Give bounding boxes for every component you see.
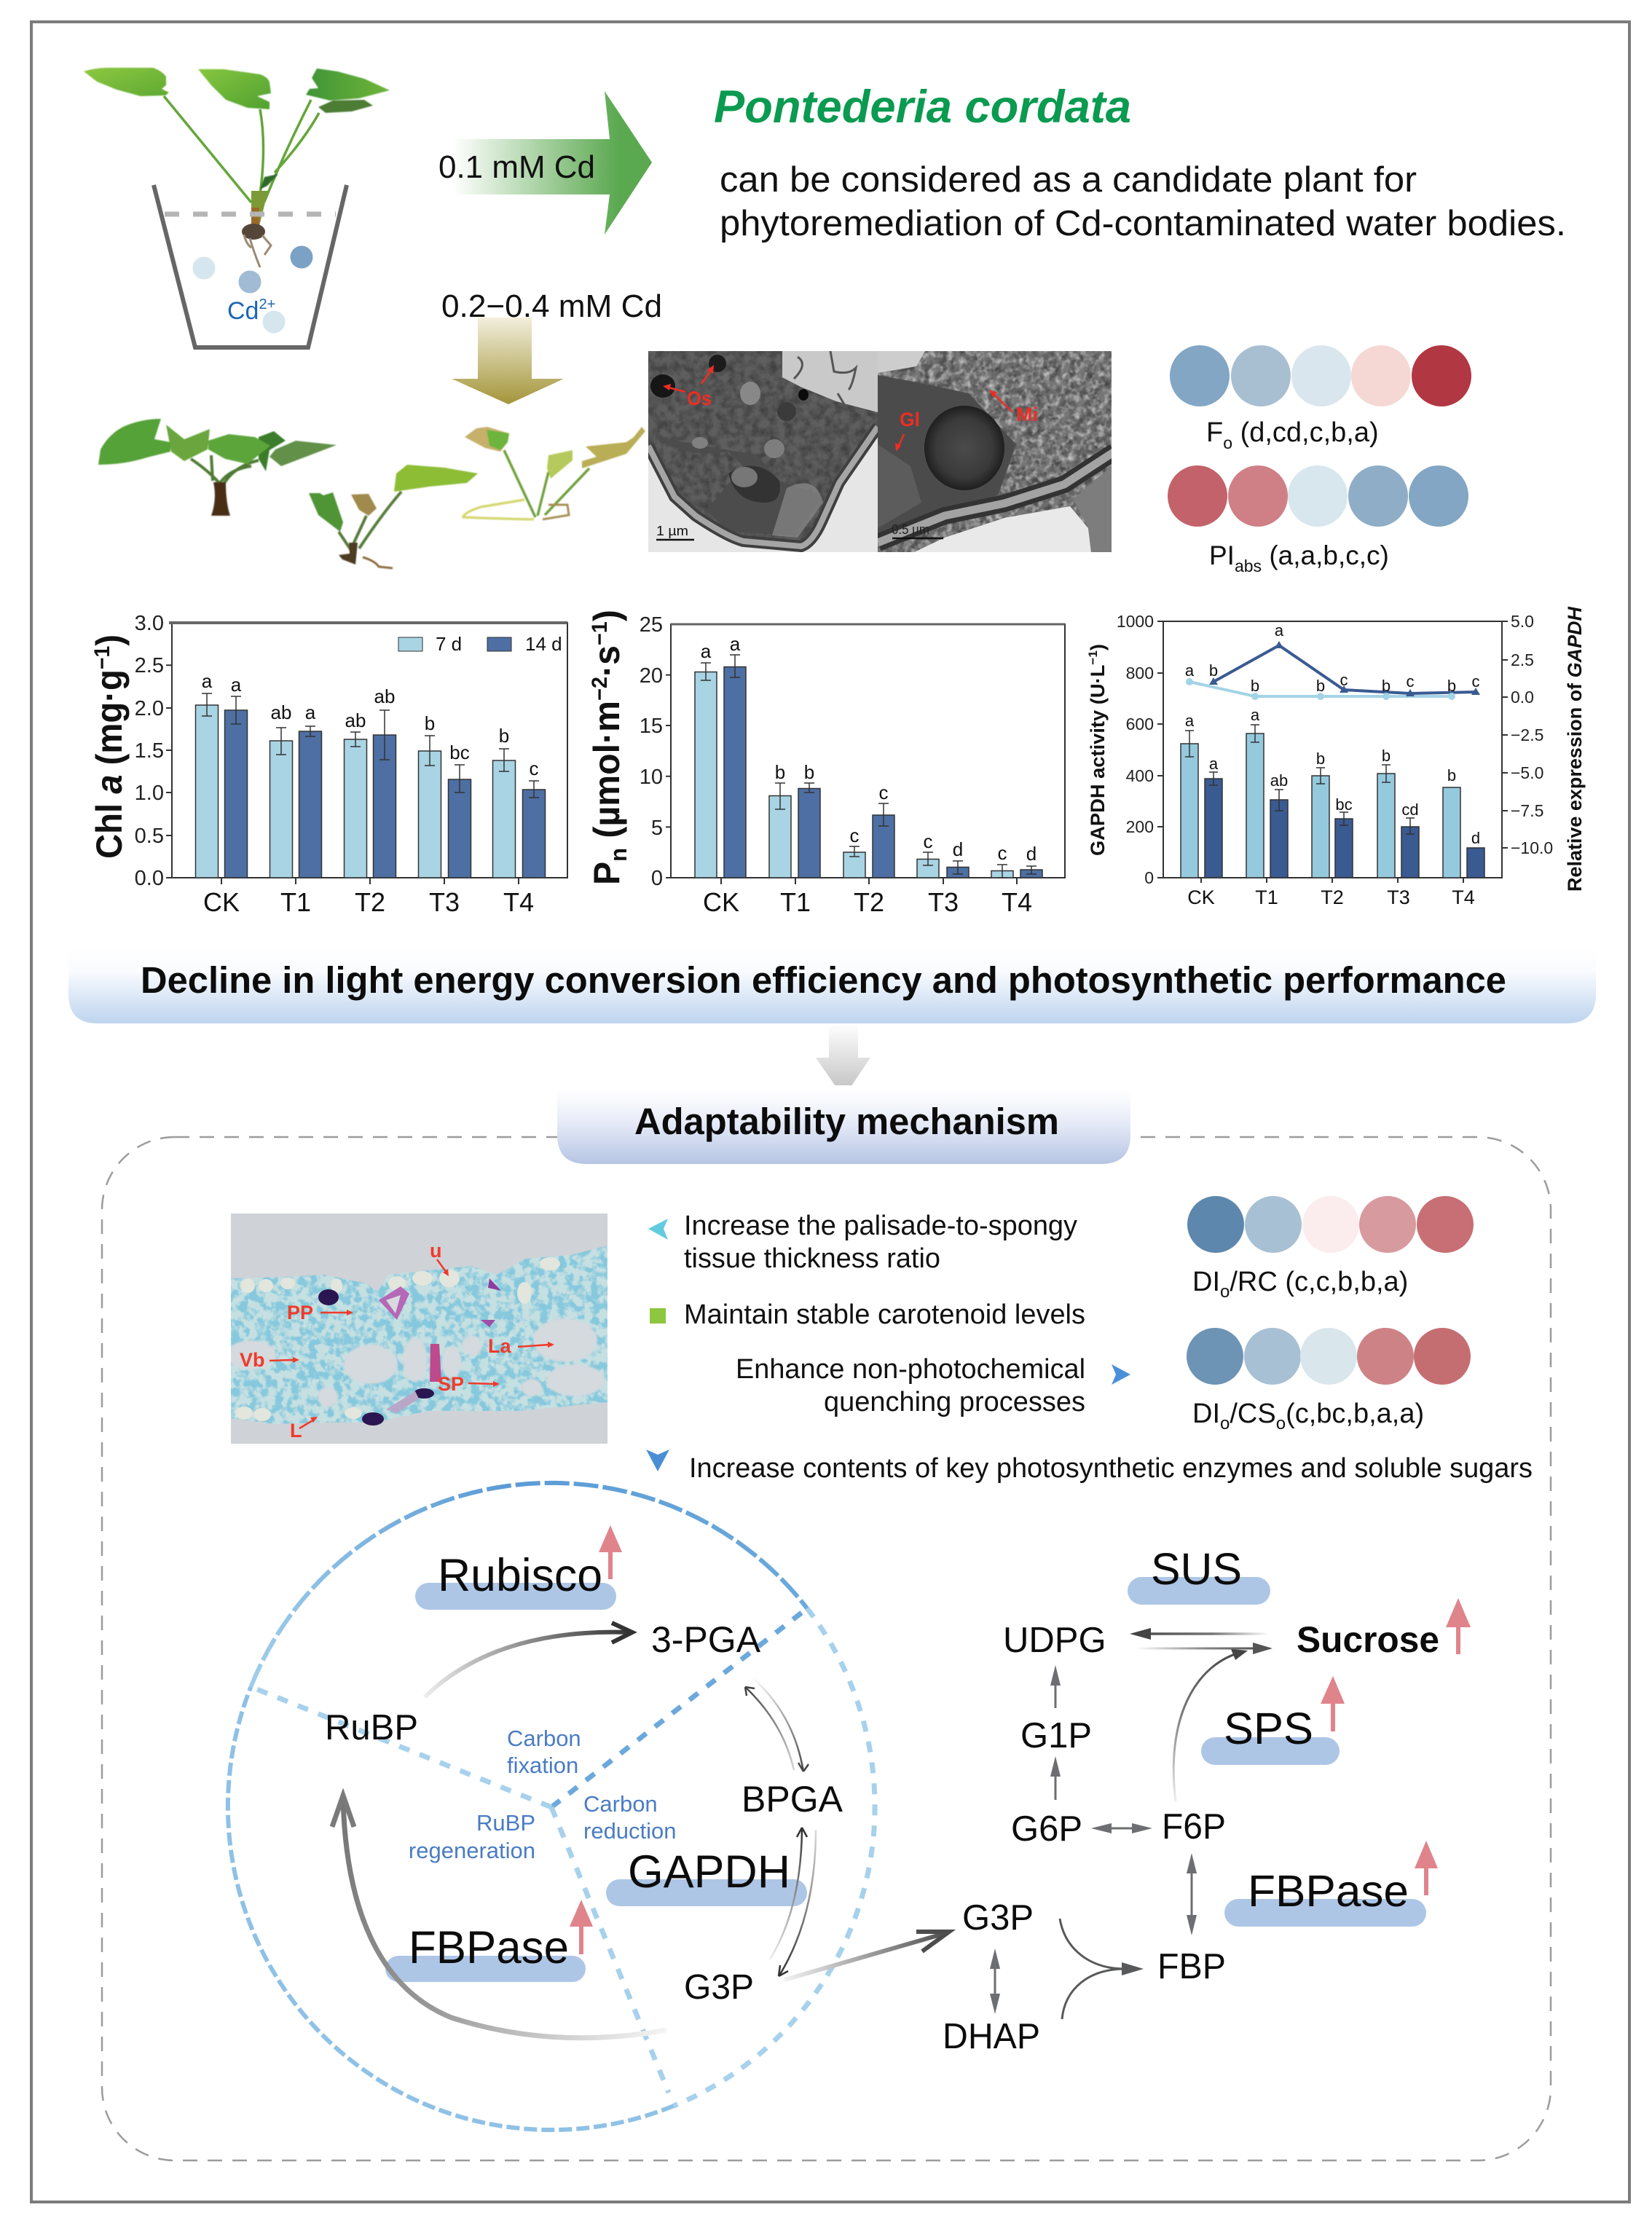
bars 7 d [195, 705, 516, 878]
y axis title: −2 [588, 677, 612, 701]
y axis title: n [605, 848, 632, 862]
banner: adaptability: Adaptability mechanism [634, 1101, 1059, 1142]
enzyme labels: FBPase [1248, 1866, 1409, 1916]
wilted plant B [309, 465, 478, 568]
significance letters: ab [1270, 771, 1288, 790]
x labels: T2 [355, 887, 385, 917]
x labels: T3 [928, 887, 959, 917]
dashed panel: adaptability mechanism [102, 1137, 1551, 2160]
y ticks: 1.5 [135, 739, 164, 763]
left y title: −1 [1086, 650, 1100, 665]
label: DIo/RC: DI [1192, 1267, 1220, 1297]
y axis title: ) [89, 634, 130, 646]
significance letters: a [730, 633, 741, 655]
left y ticks: 600 [1126, 715, 1154, 734]
significance letters: ab [345, 709, 366, 731]
arrows: 3-PGA and BPGA [745, 1679, 809, 1771]
significance letters: cd [1401, 801, 1419, 819]
x labels: CK [1187, 886, 1215, 908]
pill: FBPase [385, 1956, 586, 1982]
right y ticks: −5.0 [1511, 763, 1543, 782]
TEM arrows [666, 368, 1012, 449]
x labels: T4 [503, 887, 534, 917]
banner: decline: Decline in light energy conversion efficiency and photosynthetic performance [141, 959, 1506, 1001]
significance letters: a [1275, 621, 1284, 640]
x labels: T4 [1452, 886, 1475, 908]
significance letters: b [499, 725, 509, 747]
heat circles: Fo [1170, 345, 1471, 406]
TEM labels [663, 365, 1038, 452]
pill: FBPase right [1224, 1899, 1426, 1927]
bullet: palisade ratio: Increase the palisade-to-spongy [684, 1211, 1077, 1241]
right y ticks: −7.5 [1511, 801, 1543, 820]
significance letters: a [1185, 712, 1195, 730]
significance letters: ab [374, 685, 395, 707]
expression lines [1189, 645, 1476, 696]
conclusion text [720, 160, 1566, 243]
stage labels: fixation [507, 1753, 578, 1778]
x labels: T1 [780, 887, 811, 917]
right y ticks: −2.5 [1511, 725, 1543, 744]
y ticks: 1.0 [135, 782, 164, 805]
x labels: T2 [854, 887, 884, 917]
label: Fo: o [1223, 433, 1232, 452]
legend: 14 d [525, 633, 562, 655]
significance letters: b [804, 761, 814, 783]
label: PIabs: (a,a,b,c,c) [1262, 540, 1389, 570]
metabolite labels: FBP [1157, 1947, 1226, 1986]
top axis [671, 624, 1065, 625]
x labels: CK [703, 887, 739, 917]
plant stems [164, 96, 319, 202]
stage labels: Carbon [507, 1726, 581, 1751]
enzyme labels: GAPDH [628, 1847, 790, 1897]
label: DIo/RC: /RC (c,c,b,b,a) [1230, 1267, 1408, 1297]
significance letters: c [1340, 671, 1348, 689]
bullet: carotenoid: Maintain stable carotenoid levels [684, 1299, 1085, 1330]
bars 14 d [1205, 779, 1484, 878]
label: DIo/CSo: o [1220, 1414, 1230, 1433]
right y ticks: 2.5 [1511, 650, 1534, 669]
significance letters: c [1471, 672, 1480, 691]
significance letters: a [701, 640, 712, 662]
metabolite labels: G3P [962, 1898, 1034, 1938]
significance letters: a [202, 670, 213, 692]
significance letters [202, 670, 539, 779]
y ticks: 5 [651, 817, 663, 840]
banner: adaptability [557, 1085, 1130, 1164]
error bars [701, 655, 1037, 878]
arrow: 0.2-0.4 mM Cd: 0.2−0.4 mM Cd [441, 288, 662, 324]
label: Fo: F [1206, 417, 1223, 448]
up arrow: FBPase [570, 1900, 593, 1954]
arrow: 0.1 mM Cd [438, 91, 652, 235]
significance letters: b [1447, 766, 1456, 784]
significance letters: b [1382, 677, 1391, 695]
axis frame [1163, 621, 1502, 878]
bars 7 d [695, 672, 1013, 878]
pill: SUS [1128, 1577, 1270, 1605]
x ticks [221, 878, 519, 884]
y axis title: (µmol·m [586, 701, 627, 848]
arrow: F6P to Sucrose [1173, 1649, 1248, 1801]
metabolite labels: UDPG [1003, 1621, 1106, 1660]
significance letters [1185, 621, 1480, 847]
arrow: G3P export [784, 1932, 949, 1980]
label: Os: Os [687, 388, 712, 409]
significance letters: b [1382, 747, 1391, 765]
stage labels: reduction [583, 1818, 677, 1844]
significance letters: b [1447, 677, 1456, 695]
cadmium ions [192, 246, 313, 334]
y ticks: 25 [640, 613, 663, 637]
cycle dividers [255, 1609, 806, 2093]
y axis title: ·s [586, 645, 627, 677]
significance letters: ab [271, 701, 291, 723]
TEM micrograph left [648, 351, 878, 552]
legend [398, 633, 562, 655]
significance letters: a [1185, 661, 1195, 680]
right y title: Relative expression of GAPDH [1564, 607, 1586, 892]
x labels [1187, 886, 1475, 908]
x ticks [1201, 878, 1463, 883]
y axis title: Chl a (mg·g [89, 664, 130, 859]
section labels: PP [287, 1302, 313, 1324]
metabolite labels: F6P [1162, 1807, 1226, 1847]
Sucrose label: Sucrose [1297, 1619, 1439, 1660]
arrows: G3P and DHAP to FBP [1060, 1919, 1144, 2019]
y ticks: 20 [640, 664, 663, 688]
significance letters: b [1209, 661, 1218, 680]
label: PIabs: abs [1235, 556, 1262, 575]
significance letters: b [1316, 750, 1325, 768]
x labels [203, 887, 534, 917]
enzyme labels: FBPase [409, 1922, 569, 1973]
Cd2+ label: Cd [227, 297, 259, 325]
stage labels: Carbon [583, 1791, 658, 1817]
wilted plant A [98, 419, 337, 516]
significance letters: b [1251, 677, 1259, 695]
chart: Chl a [89, 612, 567, 917]
significance letters: c [529, 758, 539, 779]
leaf cross-section micrograph [227, 1214, 607, 1444]
pill: Rubisco [415, 1583, 616, 1610]
significance letters: d [1026, 843, 1037, 865]
label: PIabs: PI [1209, 540, 1235, 570]
y ticks: 0.0 [135, 867, 164, 890]
left y ticks [1117, 612, 1154, 887]
label: DIo/CSo: DI [1192, 1399, 1220, 1429]
arrows: gluconeogenesis steps [990, 1665, 1197, 2014]
section labels: SP [438, 1373, 464, 1395]
Calvin cycle diagram [228, 1483, 949, 2130]
species name: Pontederia cordata [714, 82, 1131, 133]
metabolite labels: G1P [1020, 1716, 1092, 1755]
heat circles: PIabs [1168, 465, 1468, 527]
x labels: T1 [1255, 886, 1278, 908]
metabolite labels [943, 1621, 1226, 2056]
x labels: T3 [429, 887, 460, 917]
heat circles: DIo/RC [1187, 1196, 1474, 1253]
significance letters: a [231, 674, 242, 696]
right y ticks: −10.0 [1511, 838, 1553, 857]
y ticks: 0 [651, 867, 663, 890]
label: DIo/CSo: o [1276, 1414, 1286, 1433]
significance letters: b [425, 712, 435, 734]
y ticks: 2.0 [135, 697, 164, 720]
label: Mi: Mi [1016, 404, 1038, 425]
significance letters: c [998, 842, 1007, 864]
arrows: UDPG and Sucrose [1130, 1628, 1273, 1654]
pill: GAPDH [606, 1879, 807, 1906]
section labels [240, 1240, 511, 1442]
TEM micrograph right [878, 351, 1114, 552]
axis frame [172, 623, 567, 878]
wilted plant C [463, 427, 645, 519]
label: Gl: Gl [900, 409, 920, 430]
significance letters: bc [449, 742, 470, 763]
chart: GAPDH [1086, 607, 1586, 908]
up arrow: Rubisco [599, 1525, 622, 1579]
bars 14 d [724, 667, 1042, 878]
bullet: non-photochemical quenching: Enhance non-photochemical [736, 1354, 1085, 1385]
y axis title: −1 [588, 621, 612, 645]
label: DIo/CSo: /CS [1230, 1399, 1276, 1429]
significance letters: b [1316, 677, 1325, 695]
label: DIo/RC: o [1220, 1282, 1230, 1302]
section labels: La [488, 1335, 511, 1357]
arrow: 0.1 mM Cd: 0.1 mM Cd [438, 149, 595, 185]
arrow: 0.2-0.4 mM Cd [441, 288, 662, 404]
arrow: RuBP to 3-PGA [425, 1623, 632, 1697]
enzyme labels: SPS [1224, 1704, 1313, 1753]
significance letters: a [1209, 755, 1219, 773]
bars 7 d [1181, 734, 1460, 878]
x ticks [721, 878, 1017, 884]
bullet: enzymes and sugars: Increase contents of key photosynthetic enzymes and soluble sugars [689, 1453, 1533, 1484]
significance letters: c [849, 825, 860, 846]
bullet: palisade ratio: tissue thickness ratio [684, 1243, 940, 1274]
section labels: u [430, 1240, 441, 1262]
healthy plant in beaker [84, 68, 390, 347]
stage labels: regeneration [409, 1838, 535, 1863]
section labels: L [290, 1420, 302, 1442]
left y title: ) [1087, 644, 1109, 650]
significance letters: a [305, 701, 316, 723]
plant base and roots [242, 191, 271, 267]
x labels: T3 [1387, 886, 1410, 908]
TEM scale bar 2: 0.5 µm [892, 522, 929, 537]
bars 14 d [224, 710, 545, 878]
y ticks: 0.5 [135, 825, 164, 848]
significance letters: bc [1335, 795, 1353, 814]
line markers [1186, 641, 1480, 700]
stained cells [318, 1278, 501, 1425]
bullet: non-photochemical quenching: quenching processes [824, 1387, 1085, 1417]
stage labels [409, 1726, 677, 1863]
y ticks: 15 [640, 715, 663, 738]
axis frame [671, 624, 1065, 878]
beaker [154, 185, 347, 347]
banner: decline [68, 947, 1596, 1023]
metabolite labels: 3-PGA [651, 1619, 761, 1660]
enzyme labels [1151, 1544, 1409, 1916]
up arrow: FBPase right [1415, 1841, 1438, 1895]
error bars [202, 693, 539, 798]
water level [165, 211, 336, 217]
metabolite labels: G6P [1011, 1809, 1082, 1849]
bullet: palisade ratio [648, 1211, 1077, 1274]
y axis title: −1 [90, 646, 114, 669]
significance letters [701, 633, 1037, 865]
metabolite labels: G3P [684, 1968, 754, 2007]
arrow: gray down [816, 1023, 870, 1098]
conclusion text: can be considered as a candidate plant for [720, 160, 1417, 200]
left y ticks: 400 [1126, 766, 1154, 785]
section labels: Vb [240, 1349, 265, 1371]
plant leaves [84, 68, 390, 189]
y ticks: 3.0 [135, 612, 164, 635]
heat circles: DIo/CSo [1187, 1328, 1471, 1385]
significance letters: a [1251, 706, 1260, 724]
metabolite labels [325, 1619, 843, 2007]
right y ticks: 0.0 [1511, 688, 1534, 707]
error bars [1185, 725, 1415, 834]
x labels: CK [203, 887, 240, 917]
arrows: BPGA and G3P [770, 1828, 816, 1976]
cycle circle [228, 1483, 875, 2130]
Cd2+ label: 2+ [259, 296, 275, 312]
top axis [169, 621, 567, 624]
right y ticks: 5.0 [1511, 612, 1534, 631]
up arrow: Sucrose [1446, 1598, 1471, 1654]
significance letters: c [924, 830, 932, 852]
significance letters: c [1406, 672, 1415, 691]
conclusion text: phytoremediation of Cd-contaminated water bodies. [720, 204, 1566, 243]
arrow: G3P to RuBP [332, 1796, 666, 2038]
metabolite labels: RuBP [325, 1708, 418, 1747]
pill: SPS [1201, 1737, 1340, 1765]
y ticks: 10 [640, 766, 663, 789]
sucrose synthesis pathway [943, 1544, 1471, 2056]
chart: Pn [586, 610, 1065, 917]
left y title: GAPDH activity (U·L [1087, 666, 1109, 856]
bullet: non-photochemical quenching [736, 1354, 1130, 1417]
y ticks [135, 612, 164, 890]
enzyme labels: SUS [1151, 1544, 1242, 1594]
section arrows [270, 1259, 554, 1428]
significance letters: b [775, 761, 785, 783]
left y ticks: 200 [1126, 817, 1154, 836]
metabolite labels: DHAP [943, 2017, 1040, 2056]
x labels: T2 [1321, 886, 1344, 908]
TEM scale bar 1: 1 µm [656, 524, 688, 538]
y axis title: P [586, 861, 627, 885]
TEM arrowheads [663, 365, 997, 452]
x labels: T1 [280, 887, 311, 917]
label: DIo/CSo: (c,bc,b,a,a) [1286, 1399, 1424, 1429]
x labels: T4 [1002, 887, 1032, 917]
right y ticks [1511, 612, 1553, 857]
enzyme labels [409, 1550, 790, 1973]
left y ticks: 0 [1144, 868, 1154, 887]
significance letters: d [953, 838, 963, 860]
y ticks: 2.5 [135, 654, 164, 677]
enzyme labels: Rubisco [438, 1550, 602, 1601]
stage labels: RuBP [476, 1810, 535, 1836]
label: Fo: (d,cd,c,b,a) [1232, 417, 1379, 448]
tissue [231, 1246, 607, 1424]
significance letters: c [878, 782, 889, 803]
left y ticks: 1000 [1117, 612, 1154, 631]
legend: 7 d [436, 633, 462, 655]
significance letters: d [1471, 829, 1480, 847]
x labels [703, 887, 1032, 917]
left y ticks: 800 [1126, 664, 1154, 683]
metabolite labels: BPGA [742, 1779, 843, 1820]
up arrow: SPS [1321, 1676, 1345, 1731]
y ticks [640, 613, 663, 890]
y axis title: ) [586, 610, 627, 621]
